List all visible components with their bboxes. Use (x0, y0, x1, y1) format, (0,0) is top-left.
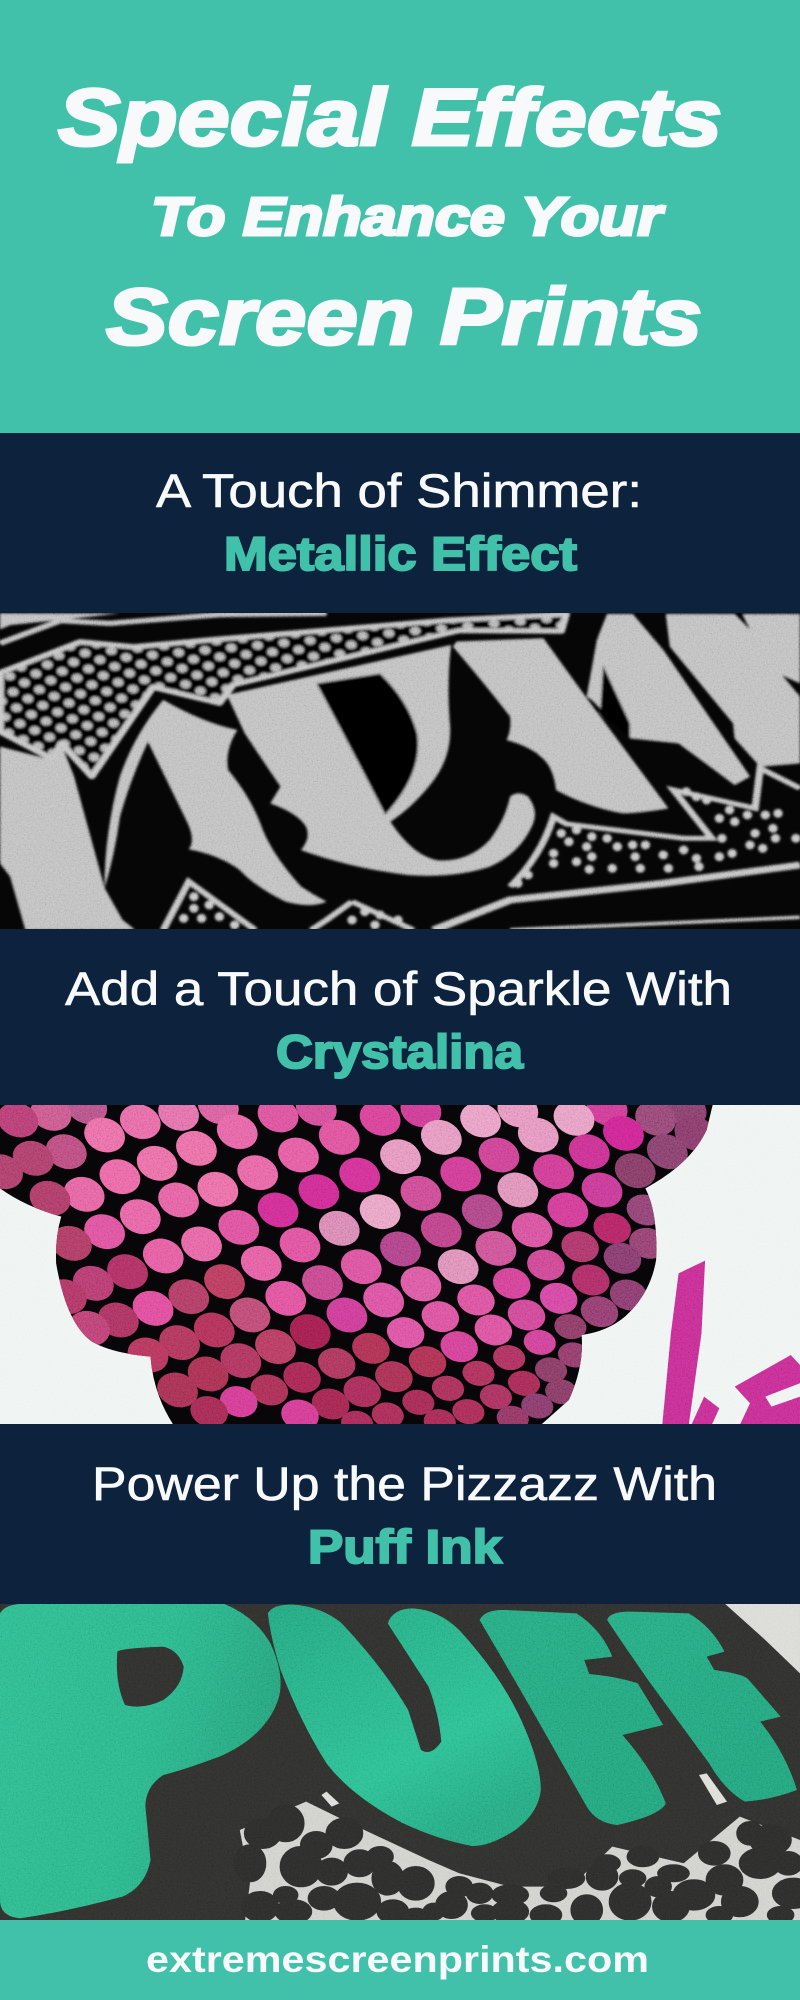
title line 3: Screen Prints (106, 272, 702, 361)
title line 2: To Enhance Your (151, 187, 665, 247)
heading band: crystalina (0, 929, 800, 1105)
puff letter F (480, 1610, 666, 1825)
photo panel: puff print (0, 1603, 800, 1923)
heading highlight: metallic effect: Metallic Effect (224, 527, 577, 580)
glitter dots (0, 1086, 721, 1438)
heading text: a touch of shimmer: A Touch of Shimmer: (156, 464, 642, 517)
footer band (0, 1920, 800, 2000)
heading highlight: crystalina: Crystalina (276, 1025, 524, 1078)
header panel (0, 0, 800, 433)
photo panel: crystalina print (0, 1086, 800, 1438)
heading band: metallic effect (0, 433, 800, 613)
heading band: puff ink (0, 1424, 800, 1604)
heading text: add a touch of sparkle: Add a Touch of Sparkle With (65, 962, 732, 1015)
photo panel: metallic print (0, 613, 800, 930)
website address: extremescreenprints.com (146, 1939, 649, 1980)
puff letter P (0, 1604, 281, 1918)
puff letter U (268, 1605, 541, 1846)
black mouse-head shape (0, 1105, 713, 1425)
heading highlight: puff ink: Puff Ink (308, 1520, 503, 1573)
pink letter fragments (662, 1261, 800, 1425)
leopard pattern (237, 1773, 800, 1923)
heading text: power up the pizzazz: Power Up the Pizzazz With (92, 1457, 717, 1510)
puff letter F second (607, 1612, 797, 1802)
white garment corner (724, 1603, 800, 1673)
title line 1: Special Effects (58, 73, 722, 163)
